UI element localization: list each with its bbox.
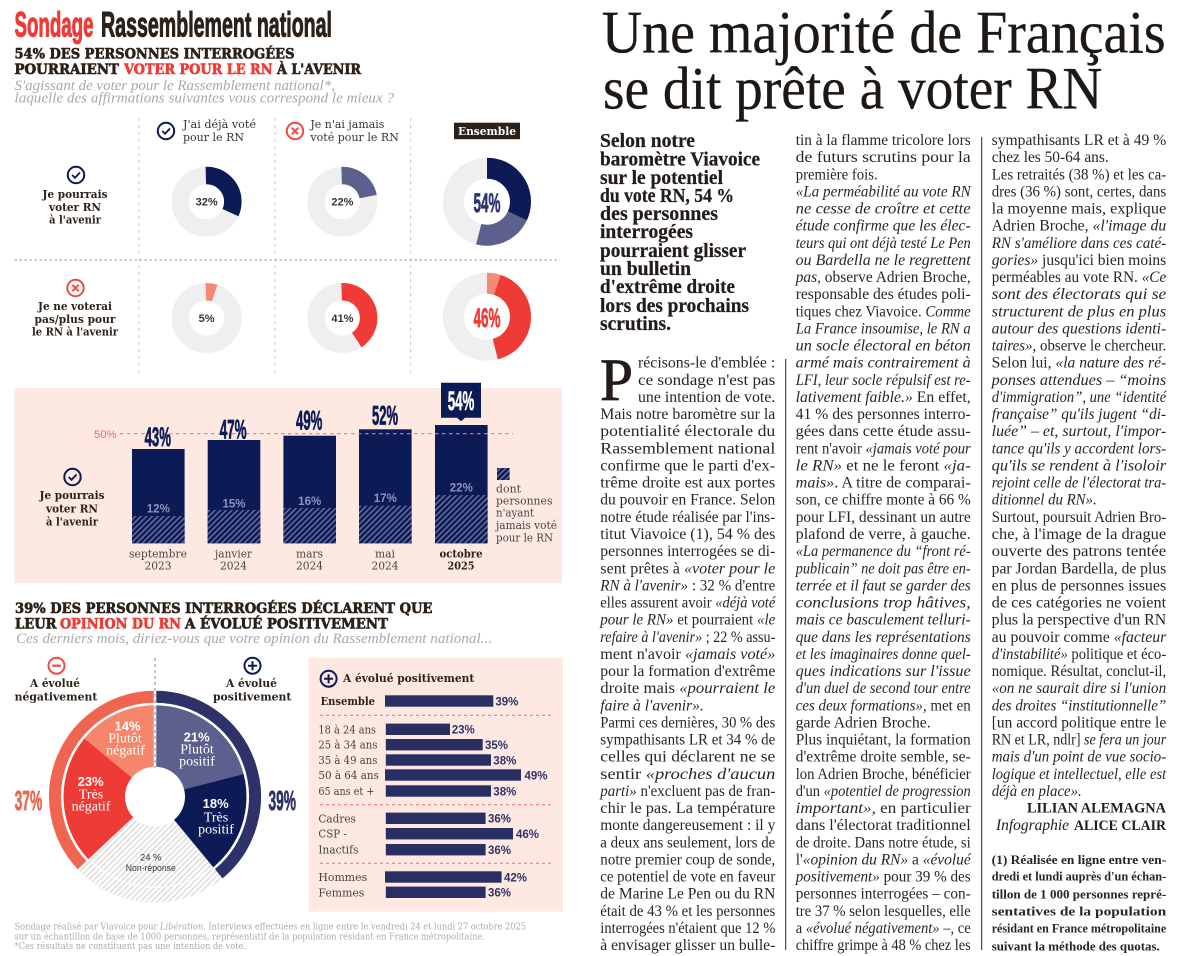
article column 1: celles qui déclarent ne se	[600, 749, 775, 766]
row label: Je pourrais voter RN	[42, 167, 107, 226]
column header: J'ai déjà voté: pour le RN	[183, 130, 244, 144]
legend: jamais voté	[494, 519, 557, 532]
article column 1: refaire à l'avenir» ; 22 % assu-	[600, 629, 775, 646]
article column 2: ques indications sur l'issue	[796, 663, 971, 680]
panel heading: A évolué positivement	[342, 671, 475, 685]
article column 2: lativement faible.» En effet,	[796, 389, 971, 406]
category labels: 50 à 64 ans	[318, 768, 379, 782]
article column 2: que dans les représentations	[796, 629, 971, 646]
category labels: 18 à 24 ans	[318, 722, 376, 736]
lead paragraph	[600, 131, 760, 335]
bar values: 36%	[488, 845, 511, 857]
pie labels: Très	[79, 788, 103, 802]
bar totals: 49%	[296, 406, 322, 436]
hatched values: 16%	[298, 496, 321, 508]
row label: Je pourrais voter RN: Je pourrais	[39, 488, 104, 502]
text: source: *Ces résultats ne constituent pas une intention de vote.	[15, 941, 246, 952]
article column 3: d'instabilité» politique et éco-	[992, 646, 1166, 663]
pie labels: Plutôt	[108, 732, 142, 746]
category labels: CSP -	[318, 827, 347, 841]
column header: Je n'ai jamais voté: voté pour le RN	[309, 130, 399, 144]
article column 1: confirme que le parti d'ex-	[600, 458, 775, 474]
article column 3: logique et intellectuel, elle est	[992, 766, 1167, 783]
pie labels: 23%	[78, 774, 104, 789]
category labels: Hommes	[318, 870, 367, 884]
category labels	[318, 694, 379, 899]
pie labels: Très	[204, 811, 228, 826]
panel: infographic left column	[14, 6, 563, 952]
article column 3: par Jordan Bardella, de plus	[992, 560, 1166, 577]
heading: Sondage Rassemblement national: Rassemblement national	[101, 6, 332, 45]
heading: 39% opinion du RN: LEUR	[15, 617, 57, 633]
article column 3: déjà en place».	[992, 783, 1082, 800]
article column 2: d'un «potentiel de progression	[796, 783, 971, 800]
donut: 22%	[316, 175, 369, 228]
label: A évolué positivement	[213, 658, 292, 704]
article column 2: d'extrême droite semble, se-	[796, 749, 971, 766]
callout: 54%	[441, 383, 481, 421]
article column 3: ditionnel du RN».	[992, 492, 1097, 509]
footnote: suivant la méthode des quotas.	[992, 939, 1160, 954]
article column 1: titut Viavoice (1), 54 % des	[600, 526, 775, 543]
title: se dit prête à voter RN	[603, 56, 1102, 122]
category labels: 35 à 49 ans	[318, 753, 377, 767]
article column 1: de Marine Le Pen ou du RN	[600, 886, 775, 903]
panel: bar chart evolution	[14, 383, 562, 583]
bar values: 49%	[524, 770, 548, 782]
bar values: 23%	[452, 724, 475, 736]
article column 1: ce sondage n'est pas	[638, 372, 775, 389]
article column 1: sentir «proches d'aucun	[600, 766, 776, 783]
article column 3: luée” – et, surtout, l'impor-	[992, 423, 1166, 440]
donut: 5%	[180, 292, 233, 344]
donut: 5%: 5%	[199, 313, 215, 325]
heading: 54% voter pour le RN: VOTER POUR LE RN	[123, 62, 272, 78]
lead paragraph: un bulletin	[600, 259, 691, 280]
article column 2: gées dans cette étude assu-	[796, 423, 971, 440]
heading: 39% opinion du RN: A ÉVOLUÉ POSITIVEMENT	[184, 617, 388, 633]
article column 3: française” qu'ils jugent “di-	[992, 406, 1166, 423]
article column 2: tre 37 % selon lesquelles, elle	[796, 903, 971, 920]
category labels: Inactifs	[318, 843, 358, 857]
article column 1: faire à l'avenir».	[600, 697, 704, 714]
article column 2: mais ce basculement telluri-	[796, 612, 971, 629]
article column 3: nomique. Résultat, conclut-il,	[992, 663, 1166, 680]
category labels: Femmes	[318, 885, 364, 899]
pie labels: 18%	[203, 796, 229, 811]
panel: infographic left column: 37%	[15, 785, 42, 816]
article column 3: «on ne saurait dire si l'union	[992, 680, 1166, 697]
article column 2: de droite. Dans notre étude, si	[796, 834, 971, 851]
x axis dates: octobre	[440, 548, 482, 561]
x axis dates: 2024	[220, 560, 247, 572]
article column 1: personnes interrogées se di-	[600, 543, 775, 560]
article column 1: interrogées n'étaient que 12 %	[600, 920, 775, 937]
article column 3: structurent de plus en plus	[992, 303, 1166, 320]
donut: 41%	[316, 292, 369, 344]
article column 1: potentialité électorale du	[600, 423, 776, 440]
article column 2: «La perméabilité au vote RN	[796, 183, 972, 200]
label: A évolué positivement: positivement	[213, 690, 292, 704]
bar totals: 43%	[145, 422, 171, 452]
byline: ALICE CLAIR	[1074, 818, 1166, 834]
text: question 2: Ces derniers mois, diriez-vous que votre opinion du Rassemblement national...	[16, 631, 492, 647]
article column 3: che, à l'image de la drague	[992, 526, 1166, 543]
article column 1: une intention de vote.	[638, 389, 775, 406]
bar totals: 47%	[220, 415, 247, 445]
lead paragraph: Selon notre	[600, 131, 695, 152]
footnote: (1) Réalisée en ligne entre ven-	[992, 852, 1166, 867]
bars by category	[385, 695, 521, 898]
article column 2: positivement» pour 39 % des	[795, 869, 971, 886]
footnote: dredi et lundi auprès d'un échan-	[992, 869, 1166, 884]
article column 2: conclusions trop hâtives,	[796, 594, 971, 612]
article column 1: trême droite est aux portes	[600, 475, 775, 492]
legend: dont	[496, 482, 522, 495]
row label: Je pourrais voter RN	[39, 469, 104, 529]
article column 2: étude confirme que les élec-	[796, 218, 971, 235]
article column 2: un socle électoral en béton	[796, 338, 971, 355]
heading: 39% opinion du RN: 39% DES PERSONNES INTERROGÉES DÉCLARENT QUE	[15, 601, 432, 617]
article column 2: ou Bardella ne le regrettent	[796, 252, 971, 269]
bar values: 38%	[493, 756, 516, 768]
article column 2: important», en particulier	[796, 800, 972, 817]
50% reference line: 50%	[94, 429, 117, 441]
lead paragraph: baromètre Viavoice	[600, 150, 760, 171]
bar values: 42%	[504, 872, 527, 884]
heading: 54% voter pour le RN	[14, 46, 362, 78]
donut: Ensemble 54%	[454, 168, 520, 235]
chart: pie opinion	[55, 658, 255, 903]
chart: pie opinion: Non-réponse	[126, 863, 176, 874]
hatched values: 12%	[147, 504, 170, 516]
donut: 22%: 22%	[331, 196, 354, 208]
lead paragraph: pourraient glisser	[600, 241, 746, 262]
column header: Ensemble: Ensemble	[458, 125, 516, 138]
article column 2: rent n'avoir «jamais voté pour	[796, 440, 972, 457]
article column 2	[795, 132, 972, 954]
panel: infographic left column: 39%	[268, 785, 296, 816]
article column 3: sympathisants LR et à 49 %	[992, 132, 1166, 149]
row label: Je pourrais voter RN: Je pourrais	[42, 187, 107, 201]
bar values	[452, 696, 548, 900]
row label: Je pourrais voter RN: voter RN	[48, 200, 101, 214]
article column 3: qu'ils se rendent à l'isoloir	[992, 458, 1167, 474]
article column 3: [un accord politique entre le	[992, 714, 1166, 731]
article column 2: La France insoumise, le RN a	[795, 320, 971, 337]
pie labels	[72, 719, 234, 838]
hatched values: 22%	[450, 483, 473, 495]
footnote: résidant en France métropolitaine	[992, 921, 1166, 936]
hatched values: 15%	[222, 499, 246, 511]
article column 2: Plus inquiétant, la formation	[796, 732, 971, 749]
article column 3: chez les 50-64 ans.	[992, 149, 1109, 166]
bar values: 36%	[488, 888, 511, 900]
article column 1: notre premier coup de sonde,	[600, 852, 775, 868]
article column 2: le RN» et ne le feront «ja-	[796, 458, 971, 474]
article column 1: sent prêtes à «voter pour le	[600, 560, 775, 577]
label: A évolué négativement: A évolué	[29, 676, 80, 690]
row label: Je pourrais voter RN: à l'avenir	[46, 515, 99, 529]
donut: Ensemble 46%	[454, 283, 520, 350]
column header: Je n'ai jamais voté: Je n'ai jamais	[309, 117, 384, 131]
chart: pie opinion: 24 %	[140, 853, 162, 864]
article column 2: de futurs scrutins pour la	[796, 149, 971, 166]
article column 1: Mais notre baromètre sur la	[600, 406, 775, 423]
article column 3: dres (36 %) sont, certes, dans	[992, 183, 1166, 200]
article column 3: Les retraités (38 %) et les ca-	[992, 166, 1166, 183]
article column 1: chir le pas. La température	[600, 800, 775, 817]
article column 2: ces deux formations», met en	[796, 697, 971, 714]
lead paragraph: lors des prochains	[600, 296, 749, 317]
article column 1: à envisager glisser un bulle-	[600, 937, 775, 954]
article column 2: LFI, leur socle répulsif est re-	[795, 372, 971, 389]
category labels: Ensemble	[321, 694, 375, 708]
article column 3: des droites “institutionnelle”	[992, 697, 1166, 714]
bar values: 35%	[485, 740, 508, 752]
article column 2: publicain” ne doit pas être en-	[795, 560, 971, 577]
heading: 54% voter pour le RN: À L'AVENIR	[276, 62, 362, 78]
article column 3: sont des électorats qui se	[992, 286, 1166, 303]
article column 2: «La permanence du “front ré-	[796, 543, 971, 560]
article column 1: ment n'avoir «jamais voté»	[600, 646, 775, 663]
article column 3: mais d'un point de vue socio-	[992, 749, 1166, 766]
article column 2: pas, observe Adrien Broche,	[795, 269, 971, 286]
article column 3: ponses attendues – “moins	[991, 372, 1166, 389]
x axis dates: janvier	[213, 548, 253, 561]
article column 1: droite mais «pourraient le	[600, 680, 775, 697]
article column 1: pour le RN» et pourraient «le	[599, 612, 775, 629]
heading: 39% opinion du RN: OPINION DU RN	[60, 617, 181, 633]
article column 2: plafond de verre, à gauche.	[796, 526, 971, 543]
x axis dates: mars	[296, 548, 323, 561]
donut: Ensemble 54%: 54%	[474, 188, 500, 218]
article column 3: Selon lui, «la nature des ré-	[992, 355, 1166, 372]
article column 2: dans l'électorat traditionnel	[796, 817, 971, 834]
footnote: sentatives de la population	[992, 904, 1167, 919]
category labels: 25 à 34 ans	[318, 738, 377, 752]
x axis dates	[129, 548, 482, 572]
text: source: Sondage réalisé par Viavoice pour Libération. Interviews effectuées en ligne entre le vendredi 24 et lundi 27 octobre 2025	[15, 921, 526, 932]
bar values: 46%	[516, 829, 539, 841]
article column 3: RN s'améliore dans ces caté-	[991, 235, 1166, 252]
pie labels: Plutôt	[180, 742, 214, 758]
article column 1: ce potentiel de vote en faveur	[600, 869, 776, 886]
panel: A évolué positivement	[309, 658, 563, 912]
article column 1: pour la formation d'extrême	[600, 663, 775, 680]
article column 3: en plus de personnes issues	[992, 577, 1166, 594]
article column 2: d'un duel de second tour entre	[796, 680, 971, 697]
donut: 32%	[180, 175, 233, 228]
article column 2: tiques chez Viavoice. Comme	[796, 303, 971, 320]
donut: Ensemble 46%: 46%	[474, 303, 500, 333]
article column 2: l'«opinion du RN» a «évolué	[796, 852, 972, 868]
callout: 54%: 54%	[448, 386, 474, 416]
pie labels: négatif	[72, 800, 111, 814]
pie labels: 14%	[114, 719, 141, 734]
column header: J'ai déjà voté: J'ai déjà voté	[182, 117, 256, 131]
separators	[320, 715, 551, 863]
column rules	[786, 137, 982, 950]
article column 2: garde Adrien Broche.	[796, 714, 931, 731]
article column 1: a deux ans seulement, lors de	[600, 834, 775, 851]
heading: Sondage Rassemblement national	[14, 6, 332, 45]
heading: 54% voter pour le RN: 54% DES PERSONNES INTERROGÉES	[14, 46, 294, 62]
byline: LILIAN ALEMAGNA	[1027, 800, 1167, 816]
row label: Je ne voterai pas: le RN à l'avenir	[32, 324, 119, 338]
label: A évolué négativement	[15, 658, 98, 704]
article column 1: Rassemblement national	[600, 440, 775, 457]
x axis dates: 2025	[448, 560, 474, 572]
article column 3: Surtout, poursuit Adrien Bro-	[992, 509, 1166, 526]
label: A évolué négativement: négativement	[15, 690, 98, 704]
article column 3: de ces catégories ne voient	[992, 594, 1167, 612]
article column 3: d'immigration”, une “identité	[992, 389, 1167, 406]
article column 1	[599, 355, 776, 954]
pie labels: positif	[179, 754, 215, 770]
lead paragraph: sur le potentiel	[600, 168, 724, 189]
lead paragraph: des personnes	[600, 204, 718, 225]
x axis dates: mai	[375, 548, 395, 561]
legend	[494, 468, 557, 544]
article column 2: teurs qui ont déjà testé Le Pen	[796, 235, 971, 252]
text: source	[15, 921, 526, 952]
pie labels: négatif	[106, 744, 145, 758]
article column 1: sympathisants LR et 34 % de	[600, 732, 775, 749]
drop cap: P	[600, 347, 633, 413]
legend: n'ayant	[496, 507, 535, 520]
category labels: Cadres	[318, 811, 356, 825]
article column 2: mais». A titre de comparai-	[796, 475, 971, 492]
heading: 39% opinion du RN	[15, 601, 432, 633]
article column 3: rejoint celle de l'électorat tra-	[992, 475, 1166, 492]
article column 1: du pouvoir en France. Selon	[600, 492, 776, 509]
article column 1: récisons-le d'emblée :	[638, 355, 775, 372]
article column 2: ne cesse de croître et cette	[796, 200, 971, 218]
article column 3: RN et LR, ndlr] se fera un jour	[992, 732, 1167, 749]
article column 1: parti» n'excluent pas de fran-	[599, 783, 775, 800]
bar values: 36%	[488, 814, 511, 826]
text: source: sur un échantillon de base de 1000 personnes, représentatif de la population résidant en France métropolitaine.	[15, 931, 485, 942]
heading: 54% voter pour le RN: POURRAIENT	[14, 62, 119, 78]
legend: pour le RN	[496, 531, 553, 544]
row label: Je ne voterai pas	[32, 280, 119, 338]
lead paragraph: interrogées	[600, 222, 693, 243]
article column 2: terrée et il faut se garder des	[796, 577, 971, 594]
article column 1: RN à l'avenir» : 32 % d'entre	[599, 577, 775, 594]
article column 1: monte dangereusement : il y	[600, 817, 776, 834]
article column 3: au pouvoir comme «facteur	[992, 629, 1167, 646]
article column 2: pour LFI, dessinant un autre	[796, 509, 971, 526]
hatched values	[147, 483, 473, 516]
lead paragraph: d'extrême droite	[600, 277, 735, 298]
article column 1: notre étude réalisée par l'ins-	[600, 509, 775, 526]
article column 1: était de 43 % et les personnes	[600, 903, 775, 920]
article column 2: son, ce chiffre monte à 66 %	[796, 492, 971, 509]
footnote	[992, 852, 1167, 954]
column header: Je n'ai jamais voté	[287, 117, 399, 144]
article column 2: chiffre grimpe à 48 % chez les	[796, 937, 971, 954]
article column 3: gories» jusqu'ici bien moins	[992, 252, 1166, 269]
article column 3	[991, 132, 1167, 800]
article column 3: plus la perspective d'un RN	[992, 612, 1166, 629]
article column 2: responsable des études poli-	[796, 286, 971, 303]
article column 2: première fois.	[796, 166, 878, 183]
donut: 41%: 41%	[331, 313, 354, 325]
article	[599, 0, 1167, 954]
article column 3: Adrien Broche, «l'image du	[992, 218, 1166, 235]
article column 3: ouverte des patrons tentée	[992, 543, 1166, 560]
lead paragraph: scrutins.	[600, 314, 671, 335]
article column 3: taires», observe le chercheur.	[992, 338, 1166, 355]
byline	[995, 800, 1167, 834]
article column 3: la moyenne mais, explique	[992, 200, 1166, 218]
row label: Je ne voterai pas: Je ne voterai	[37, 299, 113, 313]
row label: Je pourrais voter RN: à l'avenir	[49, 212, 102, 226]
bar values: 39%	[495, 696, 518, 708]
category labels: 65 ans et +	[318, 784, 374, 798]
text: question: S'agissant de voter pour le Rassemblement national*,	[14, 78, 335, 94]
x axis dates: 2024	[296, 560, 323, 572]
pie labels: 21%	[184, 730, 210, 745]
article column 2: et les imaginaires donne quel-	[796, 646, 971, 663]
article column 2: armé mais contrairement à	[796, 355, 971, 372]
article column 1: elles assurent avoir «déjà voté	[600, 594, 776, 612]
article column 3: tance qu'ils y accordent lors-	[992, 440, 1166, 457]
article column 2: tin à la flamme tricolore lors	[796, 132, 971, 149]
hatched values: 17%	[374, 493, 397, 505]
article column 3: autour des questions identi-	[992, 320, 1166, 337]
row label: Je pourrais voter RN: voter RN	[45, 502, 98, 516]
byline: Infographie	[995, 817, 1069, 834]
panel: bar chart evolution: 52%	[372, 401, 398, 431]
column header: J'ai déjà voté	[158, 117, 256, 144]
text: question: laquelle des affirmations suivantes vous correspond le mieux ?	[14, 91, 395, 107]
article column 3: perméables au vote RN. «Ce	[992, 269, 1166, 286]
heading: Sondage Rassemblement national: Sondage	[14, 6, 94, 45]
bar values: 38%	[493, 786, 516, 798]
label: A évolué positivement: A évolué	[225, 676, 277, 690]
bar totals	[145, 401, 398, 452]
donut: 32%: 32%	[196, 196, 218, 208]
text: question	[14, 78, 395, 107]
footnote: tillon de 1 000 personnes repré-	[992, 886, 1166, 901]
title	[602, 0, 1166, 122]
row label: Je ne voterai pas: pas/plus pour	[34, 312, 116, 326]
article column 2: 41 % des personnes interro-	[796, 406, 971, 423]
article column 2: lon Adrien Broche, bénéficier	[796, 766, 971, 783]
legend: personnes	[496, 495, 553, 508]
x axis dates: 2023	[144, 560, 172, 572]
bars	[132, 425, 488, 543]
article column 2: a «évolué négativement» –, ce	[796, 920, 971, 937]
x axis dates: septembre	[129, 548, 187, 561]
pie labels: positif	[198, 823, 234, 838]
article column 2: personnes interrogées – con-	[796, 886, 971, 903]
lead paragraph: du vote RN, 54 %	[600, 186, 734, 207]
article column 1: Parmi ces dernières, 30 % des	[600, 714, 775, 731]
table dividers	[14, 118, 560, 373]
x axis dates: 2024	[372, 560, 398, 572]
